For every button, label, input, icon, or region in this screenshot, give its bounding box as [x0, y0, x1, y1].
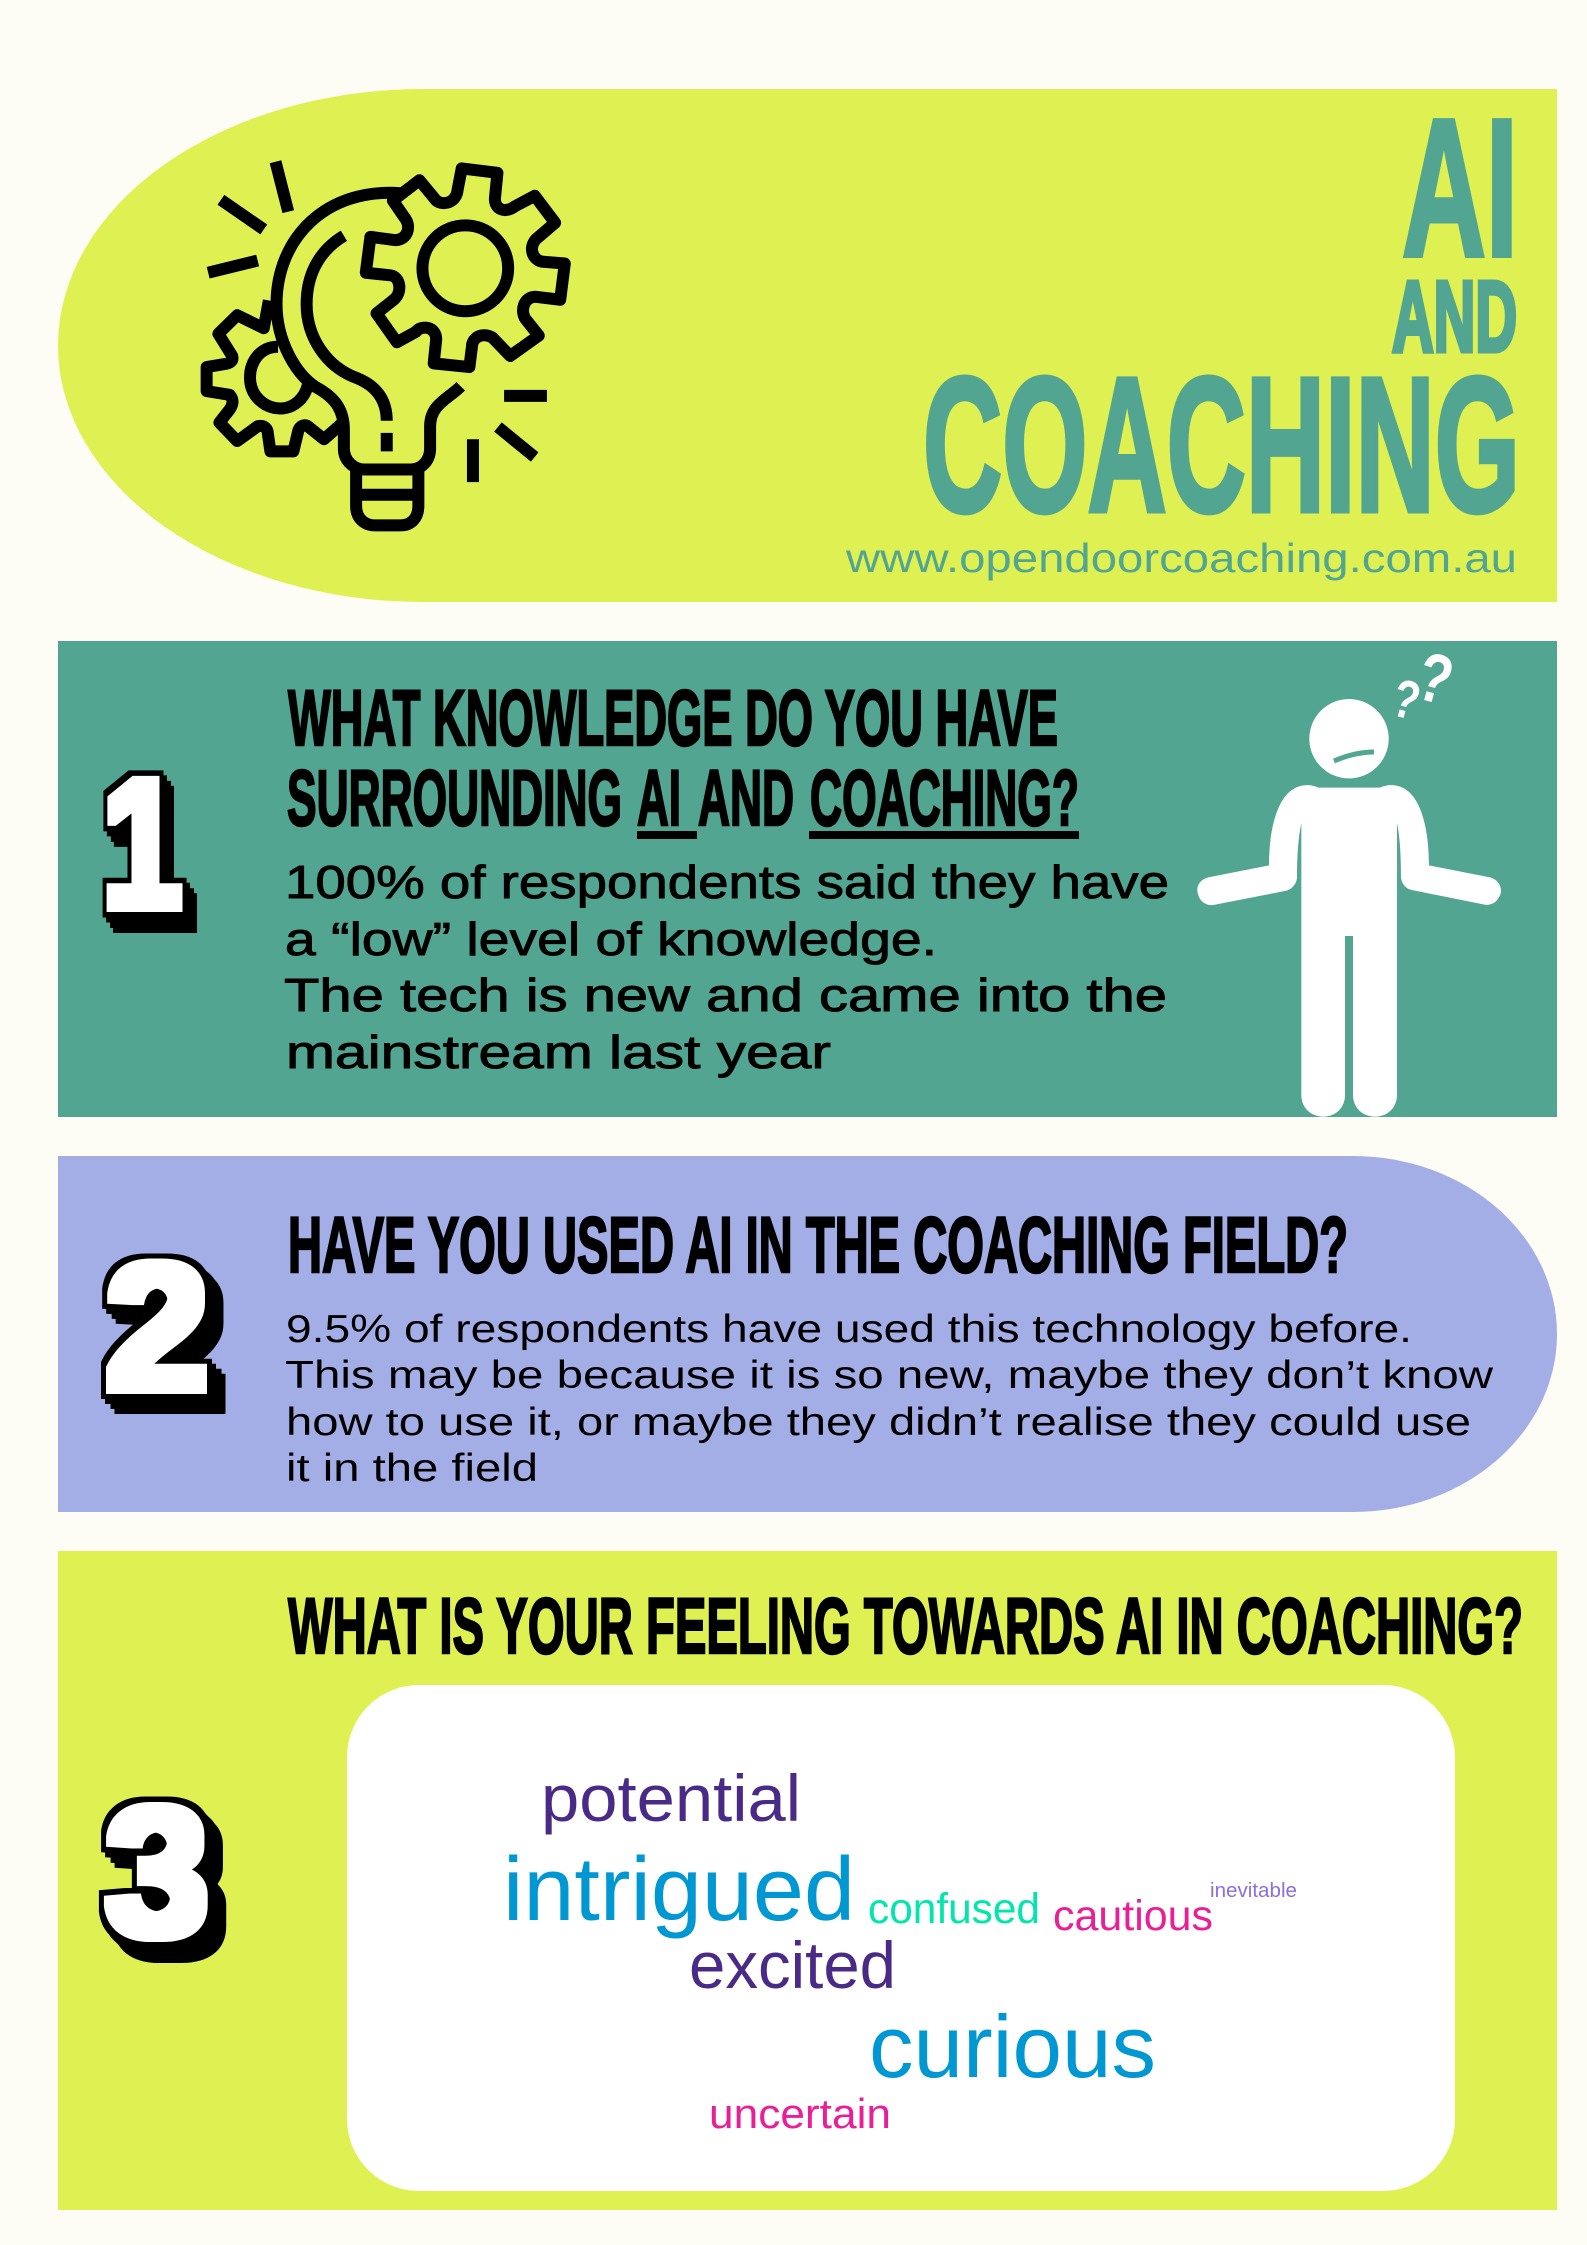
number 2: 2 — [105, 1226, 209, 1427]
panel: question 1 knowledge — [58, 638, 1557, 1117]
word cloud words: intrigued — [503, 1840, 855, 1940]
text block: answer 2: This may be because it is so new, maybe they don’t know — [285, 1354, 1494, 1397]
text block: answer 2: how to use it, or maybe they didn’t realise they could use — [286, 1401, 1471, 1444]
panel: question 2 usage — [58, 1156, 1557, 1512]
heading: question 1: SURROUNDING — [287, 753, 622, 842]
panel: title banner — [58, 78, 1557, 602]
icon: confused person shrugging: ? — [1386, 668, 1426, 733]
heading: question 1: AI — [637, 753, 681, 842]
word cloud words: curious — [869, 1997, 1156, 2096]
word cloud words: potential — [541, 1761, 801, 1835]
icon: confused person shrugging: ? — [1409, 638, 1461, 721]
text block: answer 1: mainstream last year — [286, 1026, 831, 1078]
word cloud words: uncertain — [709, 2090, 891, 2137]
website url: www.opendoorcoaching.com.au — [845, 535, 1517, 581]
icon: light bulb with gears — [207, 162, 565, 525]
text block: answer 2: 9.5% of respondents have used this technology before. — [286, 1308, 1412, 1351]
word cloud words: inevitable — [1210, 1880, 1297, 1902]
panel: question 3 feelings — [58, 1551, 1557, 2210]
word cloud card — [347, 1685, 1455, 2191]
text block: answer 1: a “low” level of knowledge. — [285, 913, 937, 965]
word cloud words — [503, 1761, 1297, 2137]
text block: answer 2: it in the field — [286, 1447, 538, 1490]
heading: question 1 — [287, 673, 1079, 842]
text block: answer 1: The tech is new and came into the — [284, 969, 1167, 1021]
text block: answer 1: 100% of respondents said they have — [285, 856, 1169, 908]
text block: answer 2 — [285, 1308, 1494, 1490]
heading: question 1: COACHING? — [810, 753, 1079, 842]
word cloud words: confused — [868, 1885, 1040, 1933]
icon: confused person shrugging — [1197, 638, 1501, 1117]
word cloud words: cautious — [1053, 1892, 1213, 1940]
number 3: 3 — [105, 1770, 209, 1975]
number 1: 1 — [101, 742, 183, 947]
word cloud words: excited — [689, 1928, 896, 2002]
text block: answer 1 — [284, 856, 1169, 1078]
heading: question 1: AND — [698, 753, 794, 842]
